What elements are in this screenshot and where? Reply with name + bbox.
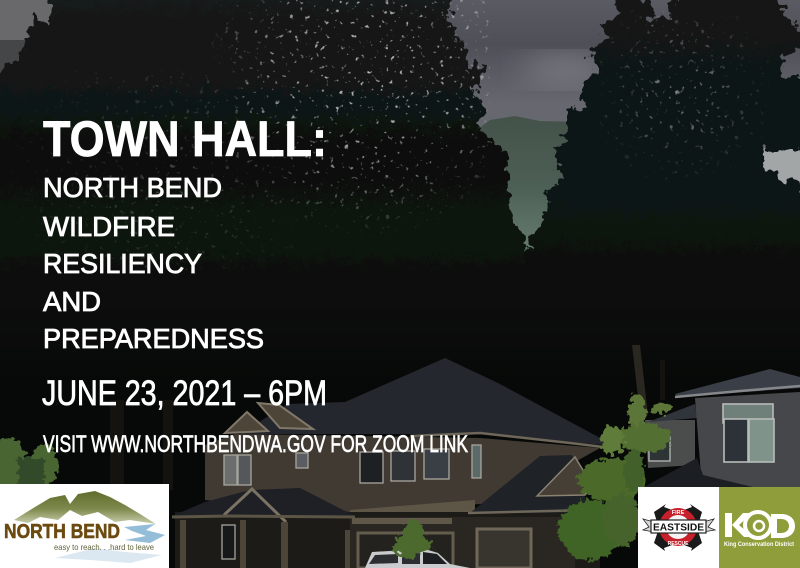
- dark lower forest: [0, 300, 800, 568]
- subtitle lines: [43, 172, 264, 354]
- sky speckles through branches: [207, 0, 490, 233]
- garage pergola: [352, 518, 452, 524]
- garage eave: [468, 510, 590, 513]
- maltese cross: [654, 504, 702, 551]
- middle section wall: [645, 420, 695, 468]
- middle roof: [648, 404, 697, 422]
- ribbon center: [651, 520, 706, 533]
- eastside label: EASTSIDE: [653, 522, 704, 534]
- red emblem: [659, 508, 697, 546]
- garage door left: [358, 533, 453, 568]
- logo: king conservation district: [719, 487, 800, 568]
- rescue label: RESCUE: [668, 541, 689, 547]
- tagline: easy to reach. . .hard to leave: [54, 542, 154, 552]
- title: town hall: TOWN HALL:: [43, 111, 327, 167]
- large window: [723, 404, 774, 462]
- ribbon: [643, 519, 715, 532]
- faint specks lower left: [28, 70, 300, 270]
- porch gable: [224, 489, 286, 522]
- river reflection: [55, 548, 162, 563]
- right eave: [675, 386, 800, 397]
- swirl c: [745, 512, 771, 538]
- date and time: JUNE 23, 2021 – 6PM: [42, 374, 327, 413]
- white truck: [365, 549, 470, 568]
- main house: [172, 358, 620, 568]
- mountain: [470, 116, 585, 260]
- right tree mass: [490, 0, 800, 568]
- right roof: [675, 369, 800, 397]
- porch roof: [172, 488, 355, 516]
- subtitle lines: WILDFIRE: [43, 211, 175, 242]
- river: [124, 524, 165, 543]
- letter k: [725, 513, 753, 537]
- subtitle lines: RESILIENCY: [43, 248, 202, 279]
- letter d: [771, 514, 795, 538]
- right house: [642, 369, 800, 488]
- porch beam: [172, 516, 355, 517]
- fire label: FIRE: [672, 510, 685, 516]
- upper windows: [224, 445, 481, 485]
- specks right tree: [600, 10, 770, 180]
- logo: north bend: [0, 484, 169, 568]
- subtitle lines: PREPAREDNESS: [43, 323, 264, 354]
- main roof: [240, 358, 615, 446]
- lower wall: [175, 512, 600, 568]
- subtitle lines: AND: [43, 286, 101, 317]
- swirl center: [754, 521, 764, 531]
- mountain emblem: [14, 491, 156, 524]
- low dark roof: [642, 458, 757, 488]
- subtitle lines: NORTH BEND: [43, 172, 222, 203]
- green tree right: [558, 394, 672, 560]
- left tree mass: [0, 0, 620, 568]
- logo: eastside fire and rescue: [638, 487, 719, 568]
- lower wall tint: [350, 517, 575, 568]
- garage door right: [477, 529, 531, 568]
- middle window: [649, 437, 670, 461]
- right wall: [695, 392, 800, 488]
- right garage roof: [470, 455, 590, 513]
- porch posts: [180, 520, 350, 568]
- left gables: [225, 403, 313, 433]
- zoom link: VISIT WWW.NORTHBENDWA.GOV FOR ZOOM LINK: [43, 431, 468, 458]
- wordmark: NORTH BEND: [4, 521, 120, 543]
- porch window: [222, 525, 235, 559]
- tree trunks: [110, 345, 665, 490]
- eave line: [410, 433, 620, 449]
- tan beam band: [350, 500, 475, 517]
- upper walls: [205, 434, 600, 512]
- emblem center: [666, 515, 690, 539]
- left bush: [0, 438, 58, 498]
- right gable: [537, 457, 592, 496]
- small green tree: [390, 518, 434, 558]
